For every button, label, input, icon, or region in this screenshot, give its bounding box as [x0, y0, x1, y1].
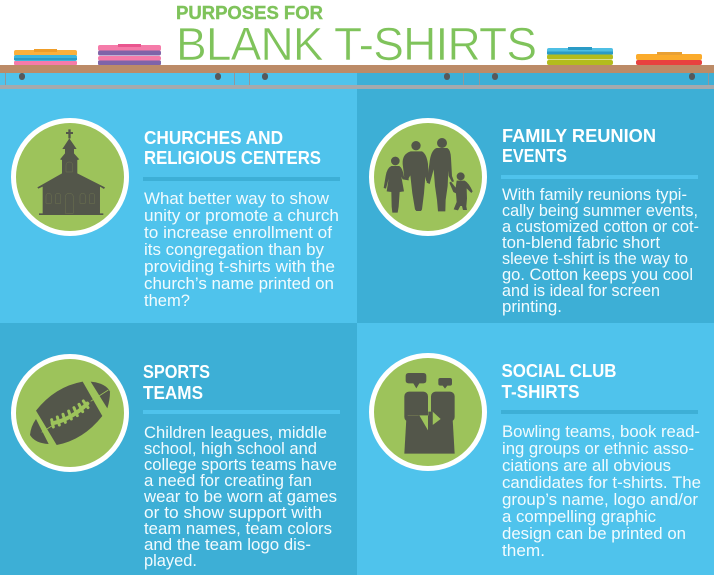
text: social body: a compelling graphic: [502, 508, 656, 526]
icon: football: [14, 356, 126, 470]
text: family body: [502, 186, 699, 316]
text: churches body: to increase enrollment of: [144, 224, 332, 242]
text: churches body: church’s name printed on: [144, 275, 334, 293]
panel: churches and religious centers: [0, 66, 357, 323]
text: social body: [502, 423, 701, 560]
text: social body: Bowling teams, book read-: [502, 423, 700, 441]
text: sports body: wear to be worn at games: [143, 488, 337, 506]
text: churches body: its congregation than by: [144, 241, 325, 259]
text: social body: design can be printed on: [502, 525, 686, 543]
heading: sports: TEAMS: [143, 382, 203, 403]
shirt stack: orange, blue, pink: [14, 49, 77, 65]
text: sports body: team names, team colors: [144, 520, 332, 538]
text: family body: go. Cotton keeps you cool: [502, 266, 693, 284]
heading: sports: [143, 361, 210, 403]
text: sports body: and the team logo dis-: [144, 536, 311, 554]
shirt stack: blue, olive: [547, 47, 613, 65]
heading: social: SOCIAL CLUB: [502, 360, 616, 381]
icon: social club: [372, 356, 484, 468]
heading: family: FAMILY REUNION: [502, 125, 656, 146]
text: sports body: [143, 424, 337, 570]
text: sports body: played.: [144, 552, 197, 570]
text: social body: them.: [502, 542, 545, 560]
text: churches body: What better way to show: [144, 190, 329, 208]
icon: family: [372, 120, 484, 234]
text: family body: a customized cotton or cot-: [502, 218, 699, 236]
heading: family: EVENTS: [502, 145, 567, 166]
table with folded shirts: [0, 44, 714, 89]
heading: churches: CHURCHES AND: [144, 127, 283, 148]
text: family body: and is ideal for screen: [502, 282, 660, 300]
heading: sports: SPORTS: [143, 361, 210, 382]
panel: sports teams: [0, 323, 357, 575]
text: family body: printing.: [502, 298, 562, 316]
text: churches body: them?: [144, 292, 190, 310]
shirt stack: orange, red: [636, 52, 702, 65]
text: sports body: school, high school and: [144, 440, 317, 458]
text: family body: ton-blend fabric short: [502, 234, 660, 252]
icon: church: [14, 120, 126, 234]
text: family body: cally being summer events,: [502, 202, 698, 220]
heading: social: T-SHIRTS: [502, 381, 580, 402]
heading: churches: RELIGIOUS CENTERS: [144, 147, 321, 168]
text: sports body: college sports teams have: [144, 456, 337, 474]
text: sports body: a need for creating fan: [144, 472, 312, 490]
text: churches body: unity or promote a church: [144, 207, 339, 225]
text: sports body: or to show support with: [144, 504, 322, 522]
text: social body: group’s name, logo and/or: [502, 491, 699, 509]
shirt stack: pink, purple: [98, 44, 161, 65]
heading: social: [502, 360, 616, 402]
table legs and rails: [5, 73, 709, 85]
heading: family: [502, 125, 656, 166]
text: sports body: Children leagues, middle: [144, 424, 327, 442]
table wheels: [19, 73, 695, 80]
header background: [0, 0, 714, 66]
panel: family reunion events: [357, 66, 714, 323]
heading: churches: [144, 127, 321, 168]
text: social body: ing groups or ethnic asso-: [502, 440, 694, 458]
text: churches body: [144, 190, 339, 310]
text: family body: With family reunions typi-: [502, 186, 687, 204]
text: churches body: providing t-shirts with the: [144, 258, 335, 276]
text: social body: ciations are all obvious: [502, 457, 671, 475]
panel: social club t-shirts: [357, 323, 714, 575]
text: social body: candidates for t-shirts. The: [502, 474, 701, 492]
title: PURPOSES FOR: [176, 2, 323, 23]
title: BLANK T-SHIRTS: [176, 18, 537, 70]
text: family body: sleeve t-shirt is the way to: [502, 250, 688, 268]
